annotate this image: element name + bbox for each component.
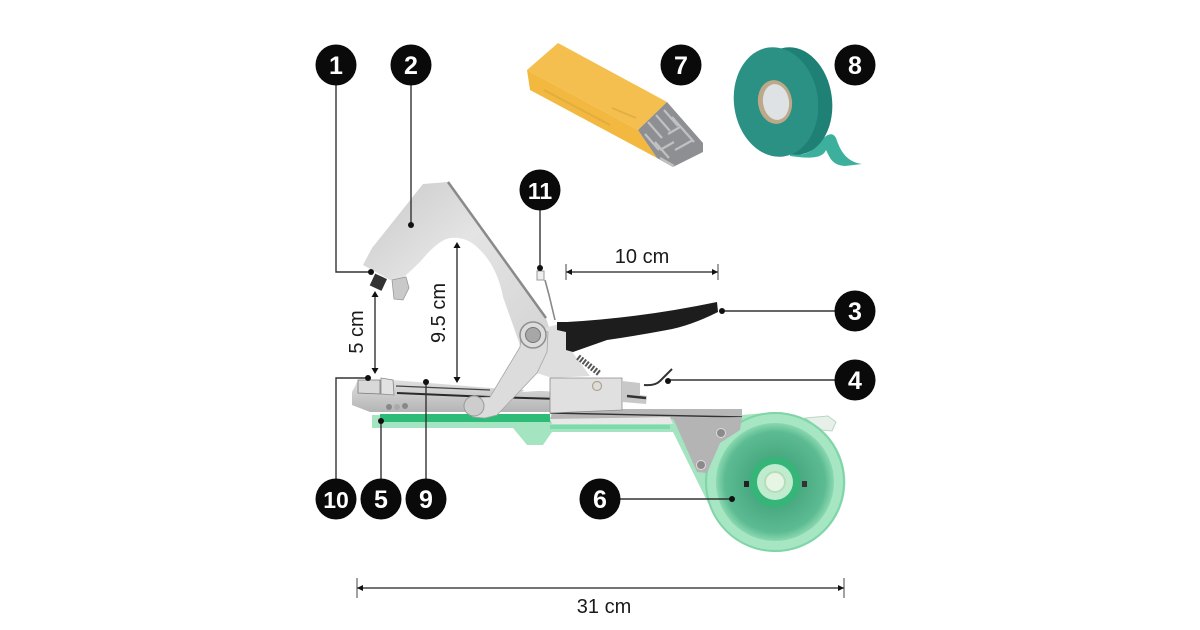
tool: top wire loop bbox=[537, 271, 555, 320]
tool: rear block and release wire bbox=[550, 369, 672, 413]
callout 7: 7 bbox=[674, 52, 688, 80]
tool: spring bbox=[578, 357, 600, 374]
tape tail bbox=[790, 134, 862, 166]
tool: operating lever and pivot bbox=[464, 322, 590, 418]
callout 1: 1 bbox=[329, 52, 343, 80]
dimension: 31 cm: 31 cm bbox=[577, 596, 631, 618]
callout 10: 10 bbox=[323, 487, 349, 513]
dimension: 10 cm bbox=[566, 246, 718, 280]
dimension: 31 cm bbox=[357, 578, 844, 618]
callout 5: 5 bbox=[374, 486, 388, 514]
callout 10 bbox=[316, 375, 371, 520]
dimension: 9.5 cm bbox=[428, 242, 460, 383]
callout 3: 3 bbox=[848, 298, 862, 326]
callout 9: 9 bbox=[419, 486, 433, 514]
callout 5 bbox=[360, 418, 402, 520]
callout 8 bbox=[834, 44, 876, 86]
callout 3 bbox=[719, 290, 876, 332]
callout 6 bbox=[580, 478, 735, 520]
callout 9 bbox=[406, 379, 446, 520]
dimension: 5 cm bbox=[346, 291, 378, 374]
callout 8: 8 bbox=[848, 52, 862, 80]
dimension: 10 cm: 10 cm bbox=[615, 246, 669, 268]
tool: black handle bbox=[557, 302, 718, 352]
callout 4: 4 bbox=[848, 367, 862, 395]
dimension: 9.5 cm: 9.5 cm bbox=[428, 283, 450, 343]
callout 11: 11 bbox=[528, 178, 552, 204]
callout 1 bbox=[316, 44, 374, 275]
callout 6: 6 bbox=[593, 486, 607, 514]
tape roll (item 8) bbox=[727, 42, 862, 166]
callout 2 bbox=[390, 44, 432, 228]
tool: upper arm bbox=[363, 182, 550, 345]
staple box (item 7) bbox=[527, 43, 703, 167]
callout 4 bbox=[665, 360, 876, 400]
callout 7 bbox=[660, 44, 702, 86]
dimension: 5 cm: 5 cm bbox=[346, 310, 368, 354]
callout 11 bbox=[520, 170, 560, 271]
callout 2: 2 bbox=[404, 52, 418, 80]
tool: reel mounting plate bbox=[673, 417, 742, 473]
tool: green tape reel housing bbox=[372, 412, 845, 552]
tool: lower jaw bar bbox=[352, 378, 742, 424]
